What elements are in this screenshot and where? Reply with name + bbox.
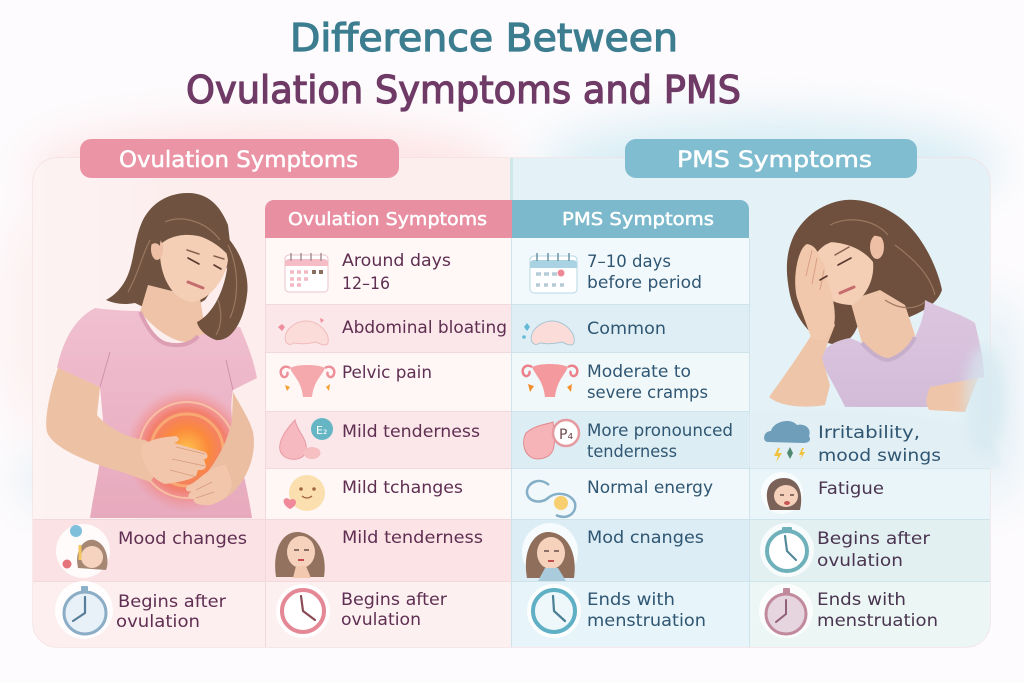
background watercolor wash [9, 115, 1019, 510]
table header: ovulation: Ovulation Symptoms [288, 209, 487, 230]
row: end timing [55, 581, 938, 639]
header band: PMS symptoms: PMS Symptoms [677, 148, 872, 173]
icon: mood girl with thought bubble [56, 524, 110, 578]
text: second mild tenderness: Mild tenderness [342, 528, 483, 548]
text: ovulation mood changes: Mood changes [118, 529, 247, 549]
text: PMS begins after ovulation: ovulation [817, 551, 903, 571]
text: second begins after ovulation: ovulation [341, 610, 421, 630]
icon: P4 breast badge [524, 420, 579, 459]
table cell backgrounds [33, 238, 990, 647]
icon: pink drop with E2 badge [280, 418, 333, 459]
text: PMS timing: 7–10 days [587, 252, 671, 272]
title [186, 16, 741, 112]
table header: ovulation [265, 200, 512, 238]
illustration: woman with headache [769, 200, 984, 412]
header band: ovulation symptoms: Ovulation Symptoms [119, 148, 358, 173]
text: PMS tenderness [587, 421, 733, 462]
icon: pink clock [276, 584, 330, 638]
text: PMS energy: Normal energy [587, 478, 713, 498]
text: first begins after ovulation: ovulation [116, 612, 200, 632]
text: PMS begins after ovulation [817, 529, 930, 571]
header band: ovulation symptoms [80, 139, 399, 178]
text: PMS timing [587, 252, 702, 293]
illustration: woman holding abdomen [46, 193, 257, 518]
text: second begins after ovulation: Begins after [341, 590, 447, 610]
text: PMS tenderness: More pronounced [587, 421, 733, 441]
table header: PMS [512, 200, 749, 238]
text: second begins after ovulation [341, 590, 447, 630]
icon: storm cloud [764, 421, 810, 462]
text: PMS mood changes: Mod cnanges [587, 528, 704, 548]
row: timing [285, 251, 702, 294]
text: first begins after ovulation: Begins after [118, 592, 226, 612]
icon: blue stopwatch [55, 581, 113, 639]
icon: pink drop with E2 badge: E₂ [316, 424, 327, 437]
title: Difference Between [290, 16, 678, 60]
text: PMS fatigue: Fatigue [818, 479, 884, 499]
row: pelvic pain [281, 362, 708, 403]
main comparison panel [33, 158, 990, 647]
text: PMS irritability: Irritability, [818, 423, 920, 443]
text: PMS begins after ovulation: Begins after [817, 529, 930, 549]
icon: P4 breast badge: P₄ [559, 427, 573, 443]
icon: tired girl [761, 472, 803, 514]
icon: blue abdomen [522, 321, 574, 345]
text: second ends with menstruation [817, 590, 938, 631]
header band: PMS symptoms [625, 139, 917, 178]
icon: smiling face [284, 475, 325, 511]
text: first begins after ovulation [116, 592, 226, 632]
text: second ends with menstruation: Ends with [817, 590, 906, 610]
text: ovulation tenderness: Mild tenderness [342, 422, 480, 442]
icon: teal wall clock [527, 584, 581, 638]
icon: blue calendar [530, 253, 577, 293]
text: PMS irritability [818, 423, 941, 466]
icon: PMS uterus [523, 364, 577, 397]
row: bloating [278, 318, 666, 345]
icon: mauve stopwatch [759, 584, 813, 638]
text: PMS cramps [587, 362, 708, 403]
text: ovulation mood: Mild tchanges [342, 478, 463, 498]
row: energy [284, 472, 884, 517]
text: ovulation bloating: Abdominal bloating [342, 318, 507, 338]
text: first ends with menstruation [587, 590, 706, 631]
text: ovulation pelvic pain: Pelvic pain [342, 363, 432, 383]
text: ovulation timing: Around days [342, 251, 451, 271]
text: first ends with menstruation: menstruation [587, 611, 706, 631]
icon: smiling woman portrait pink [275, 532, 325, 578]
icon: energy cycle [527, 481, 575, 517]
text: second ends with menstruation: menstruation [817, 611, 938, 631]
row: mood [56, 523, 930, 581]
text: ovulation timing: 12–16 [342, 274, 390, 294]
row: breast tenderness and mood [280, 418, 941, 466]
text: PMS cramps: Moderate to [587, 362, 691, 382]
icon: pink calendar [285, 253, 328, 292]
text: ovulation timing [342, 251, 451, 294]
text: PMS bloating: Common [587, 319, 666, 339]
text: PMS irritability: mood swings [818, 446, 941, 466]
table header: PMS: PMS Symptoms [562, 209, 714, 230]
icon: pink uterus [281, 365, 334, 397]
blanket mist under PMS woman [750, 345, 1005, 468]
title: Ovulation Symptoms and PMS [186, 68, 741, 112]
icon: teal clock [760, 523, 814, 577]
text: PMS tenderness: tenderness [587, 442, 677, 462]
text: first ends with menstruation: Ends with [587, 590, 675, 610]
icon: pink abdomen [278, 318, 328, 345]
icon: smiling woman portrait blue [522, 523, 578, 581]
text: PMS timing: before period [587, 273, 702, 293]
text: PMS cramps: severe cramps [587, 383, 708, 403]
